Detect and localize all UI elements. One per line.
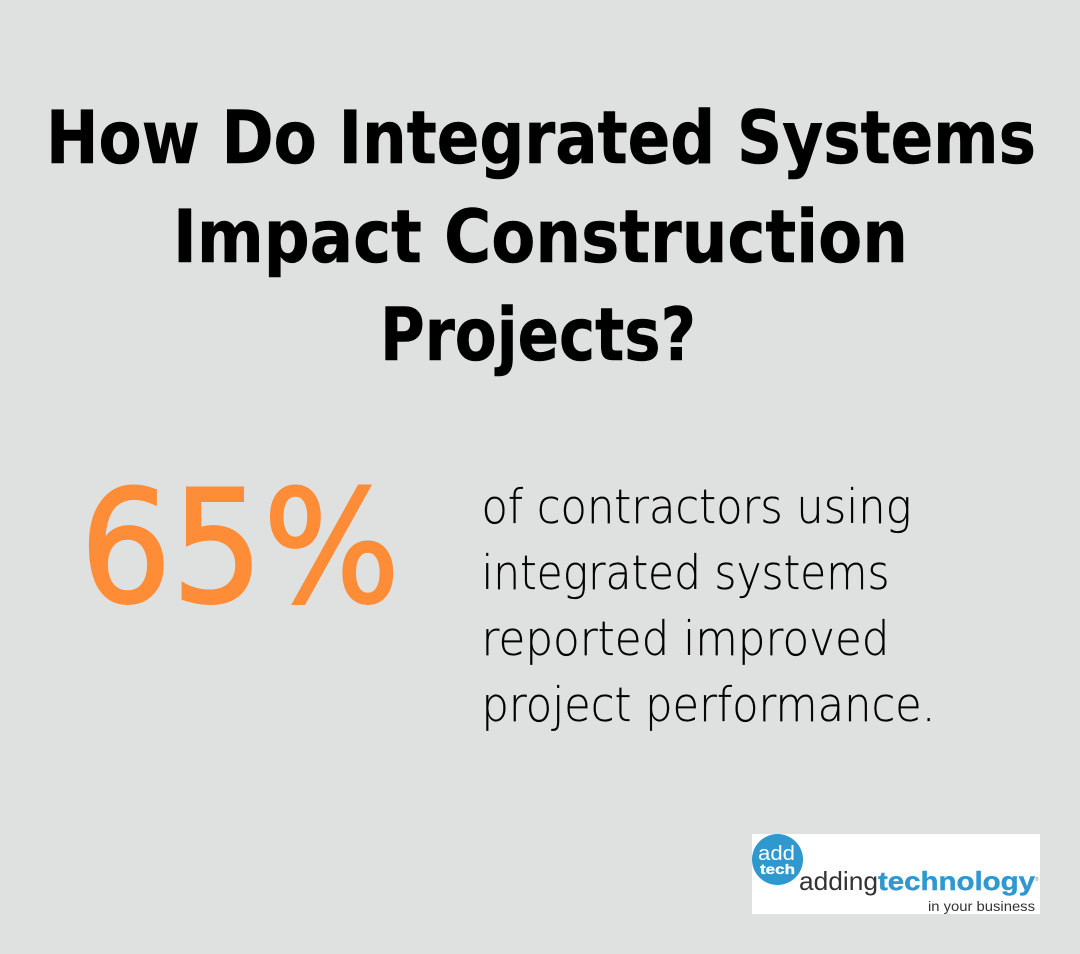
logo wordmark: ® <box>1035 876 1039 883</box>
logo wordmark: technology <box>878 866 1036 896</box>
statistic description: of contractors using <box>482 480 912 535</box>
logo badge circle: add <box>758 843 795 865</box>
title <box>46 96 1036 378</box>
statistic description: project performance. <box>482 678 936 733</box>
statistic description: integrated systems <box>482 546 890 601</box>
logo wordmark <box>799 866 1039 896</box>
logo tagline: in your business <box>928 899 1035 914</box>
logo wordmark: adding <box>799 866 878 896</box>
logo: adding technology <box>752 834 1040 914</box>
title: Projects? <box>380 293 696 378</box>
logo badge circle: tech <box>760 862 795 877</box>
logo badge circle <box>752 834 803 885</box>
statistic description <box>482 480 936 733</box>
title: Impact Construction <box>173 195 908 280</box>
statistic description: reported improved <box>482 612 890 667</box>
big statistic: 65%: 65% <box>80 456 400 638</box>
